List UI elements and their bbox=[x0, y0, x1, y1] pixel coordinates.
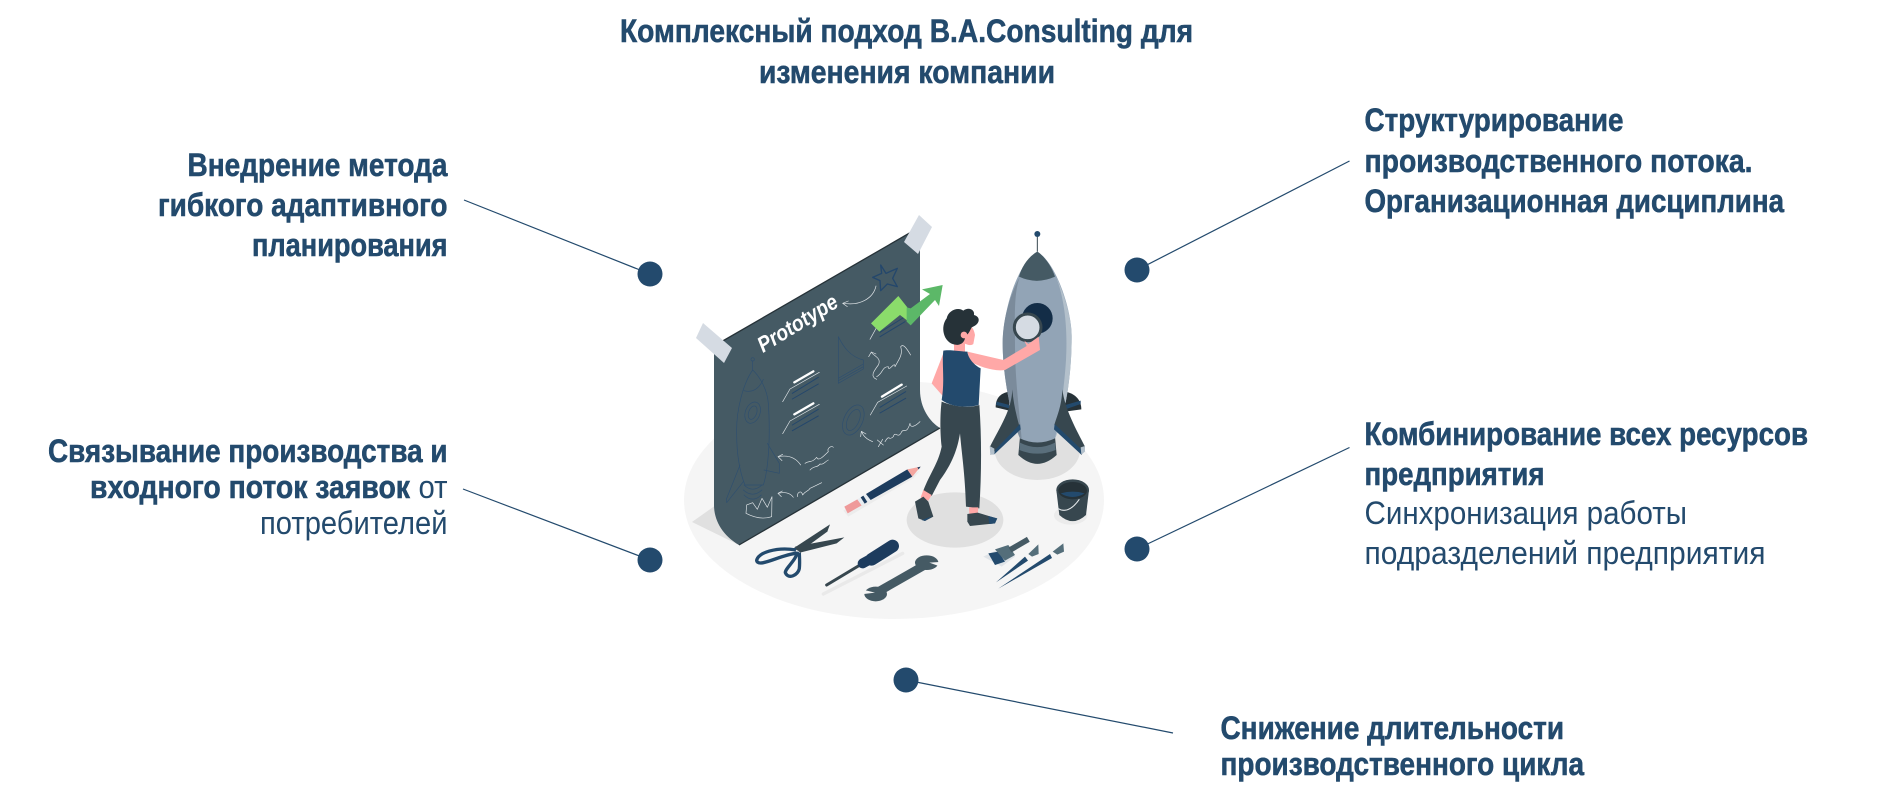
text block: linking production and orders bbox=[48, 433, 448, 541]
left arm bbox=[932, 353, 949, 397]
growth arrow bbox=[871, 285, 943, 332]
antenna bbox=[1036, 237, 1039, 252]
right arm bbox=[967, 337, 1040, 370]
callout: line and dot, top right bbox=[1124, 161, 1350, 282]
rocket body bbox=[1003, 252, 1072, 442]
neck and face bbox=[954, 342, 965, 352]
hair bbox=[943, 309, 979, 345]
text block: linking production and orders: Связывание производства и bbox=[48, 433, 448, 469]
screwdriver bbox=[823, 546, 903, 594]
tape: left bbox=[696, 323, 732, 363]
text block: structuring production flow: Организационная дисциплина bbox=[1364, 183, 1784, 219]
sketch: arrows and notes bbox=[746, 286, 920, 518]
text block: structuring production flow: производственного потока. bbox=[1364, 143, 1752, 179]
person bbox=[907, 309, 1040, 548]
back fins bbox=[996, 392, 1009, 411]
board bbox=[714, 227, 940, 545]
text block: structuring production flow bbox=[1364, 102, 1784, 219]
text block: combining resources: предприятия bbox=[1364, 456, 1544, 492]
socks bbox=[921, 490, 978, 514]
illustration: prototype and rocket scene bbox=[684, 215, 1104, 619]
rocket, arrow and person bbox=[871, 231, 1085, 548]
scissors bbox=[757, 524, 844, 576]
rocket nozzle bbox=[1018, 437, 1057, 464]
title: изменения компании bbox=[759, 54, 1055, 90]
label: Prototype: Prototype bbox=[753, 289, 842, 357]
text block: combining resources: Комбинирование всех ресурсов bbox=[1364, 416, 1808, 452]
sketch: rocket bbox=[727, 337, 869, 503]
sketch: white text lines bbox=[794, 371, 902, 414]
text block: shorter production cycle: Снижение длительности bbox=[1220, 710, 1564, 746]
title: Комплексный подход B.A.Consulting для bbox=[620, 13, 1193, 49]
tools bbox=[757, 467, 1089, 601]
shoe shadow bbox=[907, 492, 1003, 548]
sketch: blue text lines bbox=[792, 317, 906, 431]
callout: line and dot, bottom left bbox=[463, 489, 662, 572]
paint bucket bbox=[1054, 479, 1089, 525]
text block: combining resources bbox=[1364, 416, 1808, 571]
text block: structuring production flow: Структурирование bbox=[1364, 102, 1624, 138]
tape: right bbox=[904, 215, 932, 254]
shoes bbox=[915, 497, 933, 521]
text block: agile planning: Внедрение метода bbox=[188, 147, 448, 183]
board drawings bbox=[727, 265, 920, 518]
text block: linking production and orders: входного поток заявок bbox=[90, 469, 411, 505]
text block: linking production and orders: от bbox=[418, 469, 448, 505]
text block: agile planning bbox=[158, 147, 448, 263]
text block: agile planning: гибкого адаптивного bbox=[158, 187, 448, 223]
wrench bbox=[864, 555, 939, 601]
rocket nose bbox=[1019, 252, 1055, 281]
sketch: star bbox=[873, 265, 897, 291]
text block: agile planning: планирования bbox=[252, 227, 448, 263]
hatch opening bbox=[1022, 303, 1053, 334]
text block: combining resources: подразделений предприятия bbox=[1364, 535, 1766, 571]
floor bbox=[684, 381, 1104, 619]
front fins bbox=[990, 389, 1020, 455]
text block: linking production and orders: потребителей bbox=[260, 505, 448, 541]
callout: line and dot, bottom bbox=[894, 668, 1173, 733]
text block: shorter production cycle bbox=[1220, 710, 1584, 782]
callout: line and dot, middle right bbox=[1124, 448, 1350, 562]
pencil bbox=[843, 467, 921, 517]
rocket shadow bbox=[995, 420, 1080, 480]
hatch lid bbox=[1014, 314, 1041, 341]
title bbox=[620, 13, 1193, 90]
text block: combining resources: Синхронизация работы bbox=[1364, 495, 1687, 531]
paint brushes bbox=[983, 539, 1064, 589]
legs bbox=[923, 402, 981, 508]
board shadow bbox=[692, 505, 739, 545]
callout: line and dot, top left bbox=[464, 200, 662, 286]
text block: shorter production cycle: производственного цикла bbox=[1220, 746, 1584, 782]
top bbox=[942, 350, 981, 407]
